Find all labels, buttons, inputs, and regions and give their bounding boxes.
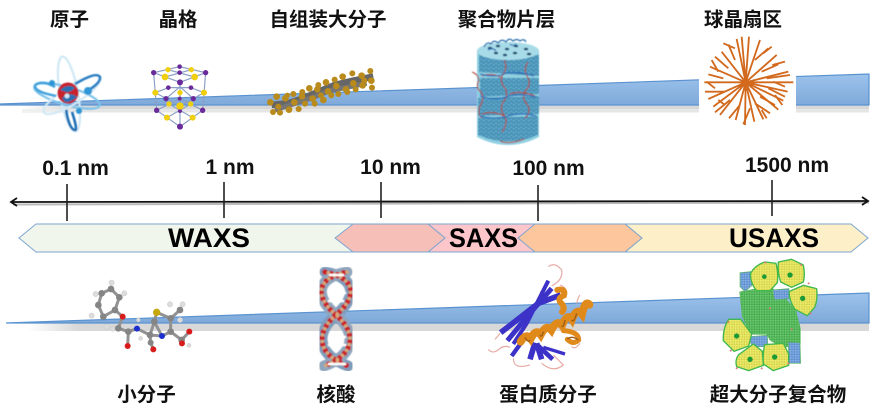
icon: self-assembled ribbon: [267, 68, 375, 116]
band: USAXS: USAXS: [729, 223, 819, 253]
white backing behind spherulite: [699, 60, 796, 116]
icon: protein ribbon: [488, 265, 589, 369]
label: 1 nm: 1 nm: [205, 156, 255, 179]
label: 100 nm: 100 nm: [512, 157, 585, 180]
icon: polymer lamellae cylinder: [472, 39, 539, 145]
label: 1500 nm: 1500 nm: [745, 154, 829, 177]
band: WAXS: WAXS: [168, 223, 250, 253]
band: SAXS: SAXS: [449, 223, 518, 253]
heading: 球晶扇区: 球晶扇区: [704, 8, 782, 31]
label: 超大分子复合物: 超大分子复合物: [710, 384, 846, 406]
band: USAXS: [518, 223, 868, 253]
panel: bottom size wedge: [6, 293, 869, 331]
icon: macromolecular complex: [723, 259, 817, 371]
band: SAXS: [335, 223, 536, 253]
label: 小分子: 小分子: [117, 384, 176, 406]
icon: atom: [32, 55, 105, 133]
heading: 聚合物片层: 聚合物片层: [458, 9, 555, 31]
scale axis with ticks: [11, 180, 869, 221]
band: WAXS: [19, 223, 353, 253]
heading: 自组装大分子: 自组装大分子: [269, 9, 387, 31]
icon: spherulite: [704, 37, 793, 125]
icon: small molecule: [89, 280, 192, 352]
icon: crystal lattice: [151, 64, 208, 130]
label: 10 nm: 10 nm: [360, 156, 421, 179]
panel: top size wedge: [0, 74, 869, 113]
label: 0.1 nm: 0.1 nm: [42, 157, 109, 180]
label: 核酸: 核酸: [316, 383, 356, 406]
heading: 晶格: 晶格: [158, 9, 198, 31]
label: 蛋白质分子: 蛋白质分子: [499, 383, 597, 406]
heading: 原子: 原子: [50, 9, 89, 31]
icon: DNA helix: [321, 272, 351, 366]
